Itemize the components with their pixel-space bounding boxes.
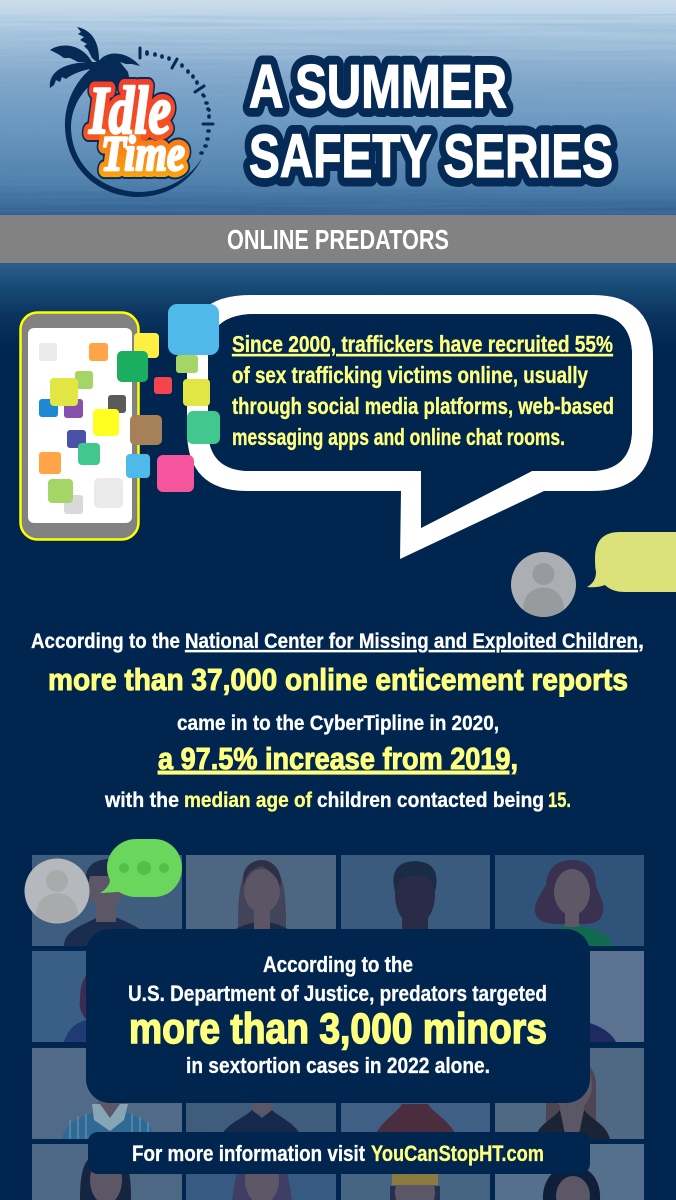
panel: sextortion statistic: more than 3,000 minors — [129, 1005, 547, 1053]
panel: sextortion statistic: in sextortion cases in 2022 alone. — [186, 1053, 490, 1078]
message bubble — [587, 532, 676, 592]
tile: row 2 col 4 — [590, 951, 644, 1042]
statistics text — [31, 629, 644, 812]
icon: grey avatar — [24, 858, 90, 924]
panel: footer link: YouCanStopHT.com — [371, 1141, 544, 1166]
icon: smartphone with app icons — [20, 304, 220, 540]
tile: row 4 col 4 — [495, 1144, 644, 1200]
panel: sextortion statistic — [86, 929, 590, 1103]
statistics text: with the — [104, 788, 179, 812]
title: A SUMMER — [249, 52, 507, 120]
statistics text: a 97.5% increase from 2019, — [158, 741, 518, 776]
app icons — [39, 304, 220, 514]
logo wordmark: Time — [101, 125, 185, 181]
video call grid of people — [32, 855, 644, 1200]
statistics text: children contacted being — [317, 788, 544, 812]
statistics text: , — [638, 629, 644, 653]
subtitle band — [0, 215, 676, 263]
icon: palm tree — [50, 27, 140, 100]
speech bubble with statistic — [187, 295, 653, 559]
tile: row 1 col 2 — [186, 855, 336, 929]
panel: footer link: For more information visit — [132, 1141, 365, 1166]
chat avatar with message bubble — [511, 532, 676, 617]
logo: Idle Time — [50, 27, 213, 197]
header sea photo — [0, 0, 676, 348]
logo wordmark: Idle — [88, 72, 171, 148]
icon: clock tick marks — [140, 48, 213, 153]
tile: row 4 col 1 — [32, 1144, 182, 1200]
chat avatar over video tile — [24, 839, 182, 924]
tile: row 1 col 4 — [495, 855, 644, 946]
logo wordmark: Idle — [88, 72, 171, 148]
statistics text: According to the — [31, 629, 180, 653]
bubble text — [232, 331, 614, 450]
bubble text: of sex trafficking victims online, usually — [232, 362, 588, 388]
statistics text: more than 37,000 online enticement reports — [48, 662, 628, 697]
title — [249, 52, 613, 190]
panel: footer link — [88, 1132, 590, 1174]
statistics text: came in to the CyberTipline in 2020, — [177, 711, 499, 735]
tile: row 3 col 3 — [341, 1103, 490, 1132]
icon: grey avatar — [511, 552, 576, 617]
icon: green chat bubble with dots — [100, 839, 182, 897]
logo wordmark: Time — [101, 125, 185, 181]
logo wordmark — [88, 72, 185, 181]
tile: row 1 col 1 — [32, 855, 182, 946]
panel: sextortion statistic: U.S. Department of Justice, predators targeted — [128, 981, 547, 1006]
tile: row 1 col 3 — [341, 855, 490, 929]
tile: row 3 col 1 — [32, 1048, 182, 1139]
statistics text: 15. — [548, 788, 571, 812]
statistics text: median age of — [184, 788, 313, 812]
tile: row 2 col 1 — [32, 951, 86, 1042]
title: A SUMMER — [249, 52, 507, 120]
tile: row 4 col 3 — [341, 1174, 490, 1200]
tile: row 3 col 4 — [495, 1048, 644, 1139]
panel: sextortion statistic: According to the — [263, 952, 413, 977]
tile: row 4 col 2 — [186, 1174, 336, 1200]
subtitle band: ONLINE PREDATORS — [227, 224, 449, 255]
icon: clock circle arc — [65, 62, 202, 197]
tile: row 3 col 2 — [186, 1103, 336, 1132]
bubble text: messaging apps and online chat rooms. — [232, 424, 565, 450]
logo wordmark: Time — [101, 125, 185, 181]
logo wordmark: Idle — [88, 72, 171, 148]
